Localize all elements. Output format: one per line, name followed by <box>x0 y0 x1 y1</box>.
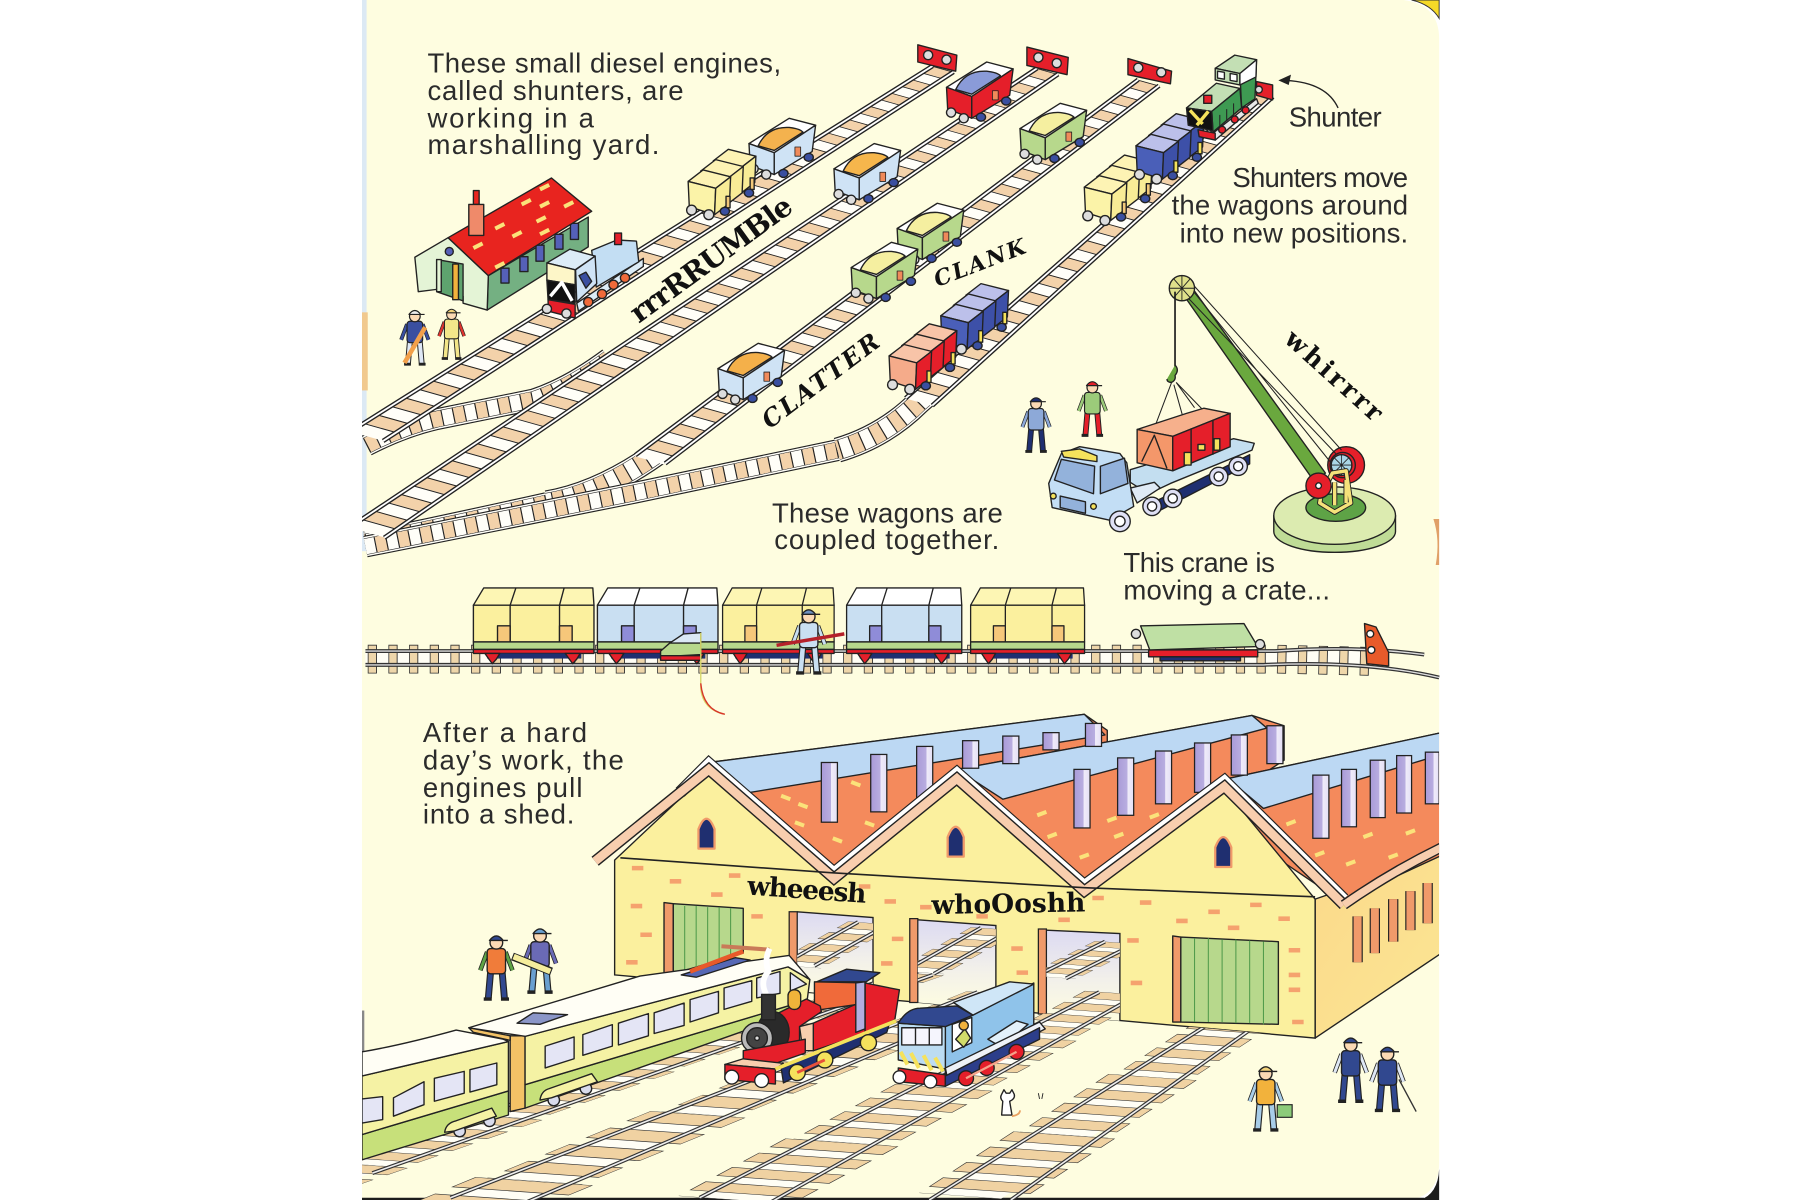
bricks <box>626 868 1304 1022</box>
sleepers: straight tracks <box>367 69 1263 533</box>
green flat wagon <box>1131 624 1265 661</box>
page-overlap wedge <box>661 633 725 714</box>
text: after a hard day: day’s work, the <box>423 744 624 775</box>
text: coupled wagons: coupled together. <box>774 524 999 555</box>
roof highlights <box>781 782 1415 865</box>
sleepers: right track <box>970 1023 1235 1197</box>
shed: marshalling yard <box>415 178 592 310</box>
text: shunter intro: working in a <box>426 102 595 133</box>
sound word: rrrRRUMBle: rrrRRUMBle <box>623 189 799 329</box>
bargeboards <box>595 764 1441 905</box>
crossover tracks <box>365 358 936 547</box>
gable windows <box>698 819 1231 867</box>
green door left <box>664 903 743 974</box>
text: shunter intro: These small diesel engines, <box>427 47 781 78</box>
lorry with crate <box>1049 408 1254 532</box>
rear coach <box>362 1030 508 1160</box>
sound word: whoOoshh: whoOoshh <box>930 887 1086 921</box>
text: shunters move: into new positions. <box>1180 217 1408 248</box>
sound word: CLANK: CLANK <box>931 234 1031 293</box>
coach joint <box>510 1036 525 1112</box>
green door right <box>1173 936 1278 1024</box>
text: after a hard day: into a shed. <box>423 798 574 829</box>
text: after a hard day: engines pull <box>423 772 582 803</box>
crane <box>1152 276 1396 552</box>
steam locomotive <box>725 949 899 1087</box>
electric train <box>362 946 810 1160</box>
workers: crane <box>1022 382 1106 451</box>
sleepers: diesel engine track <box>735 993 1119 1200</box>
arrow: shunter label <box>1278 75 1338 108</box>
front coach <box>469 946 810 1108</box>
text: shunter intro: called shunters, are <box>427 75 684 106</box>
text: shunter intro: marshalling yard. <box>427 129 659 160</box>
text: crane: moving a crate... <box>1123 574 1330 605</box>
text: shunters move: the wagons around <box>1172 190 1408 221</box>
worker with pole <box>777 610 844 673</box>
icon: cat <box>1001 1090 1043 1116</box>
engine shed <box>595 714 1441 1038</box>
text: coupled wagons: These wagons are <box>772 497 1003 528</box>
middle track <box>365 649 1439 678</box>
sound word: wheeesh: wheeesh <box>745 871 868 910</box>
sleepers: steam engine track <box>371 993 995 1200</box>
yard tracks <box>349 66 1273 547</box>
lower tracks <box>362 920 1261 1200</box>
text: crane: This crane is <box>1123 547 1275 578</box>
buffer stop <box>1364 624 1389 666</box>
sound word: whirrrr: whirrrr <box>1278 323 1390 427</box>
shed roofs <box>680 714 1441 901</box>
rails <box>317 922 1258 1200</box>
sleepers: track under coaches <box>362 922 1120 1184</box>
wagons <box>687 62 1204 404</box>
text: after a hard day: After a hard <box>423 717 587 748</box>
coupled wagons train <box>473 588 1085 664</box>
sound word: CLATTER: CLATTER <box>756 327 885 434</box>
shed side wall <box>1315 856 1441 1038</box>
workers: shed <box>480 929 1416 1130</box>
shed front wall <box>615 772 1315 1038</box>
shed openings <box>797 912 1120 1021</box>
blue shunter <box>542 233 643 318</box>
blue diesel locomotive <box>893 982 1045 1088</box>
rails: straight tracks <box>349 66 1273 538</box>
green shunter <box>1187 55 1258 140</box>
label: Shunter: Shunter <box>1289 101 1382 132</box>
text: shunters move: Shunters move <box>1232 162 1408 193</box>
roof vents <box>821 723 1439 838</box>
workers: yard <box>401 309 464 364</box>
buffers <box>918 45 1273 100</box>
